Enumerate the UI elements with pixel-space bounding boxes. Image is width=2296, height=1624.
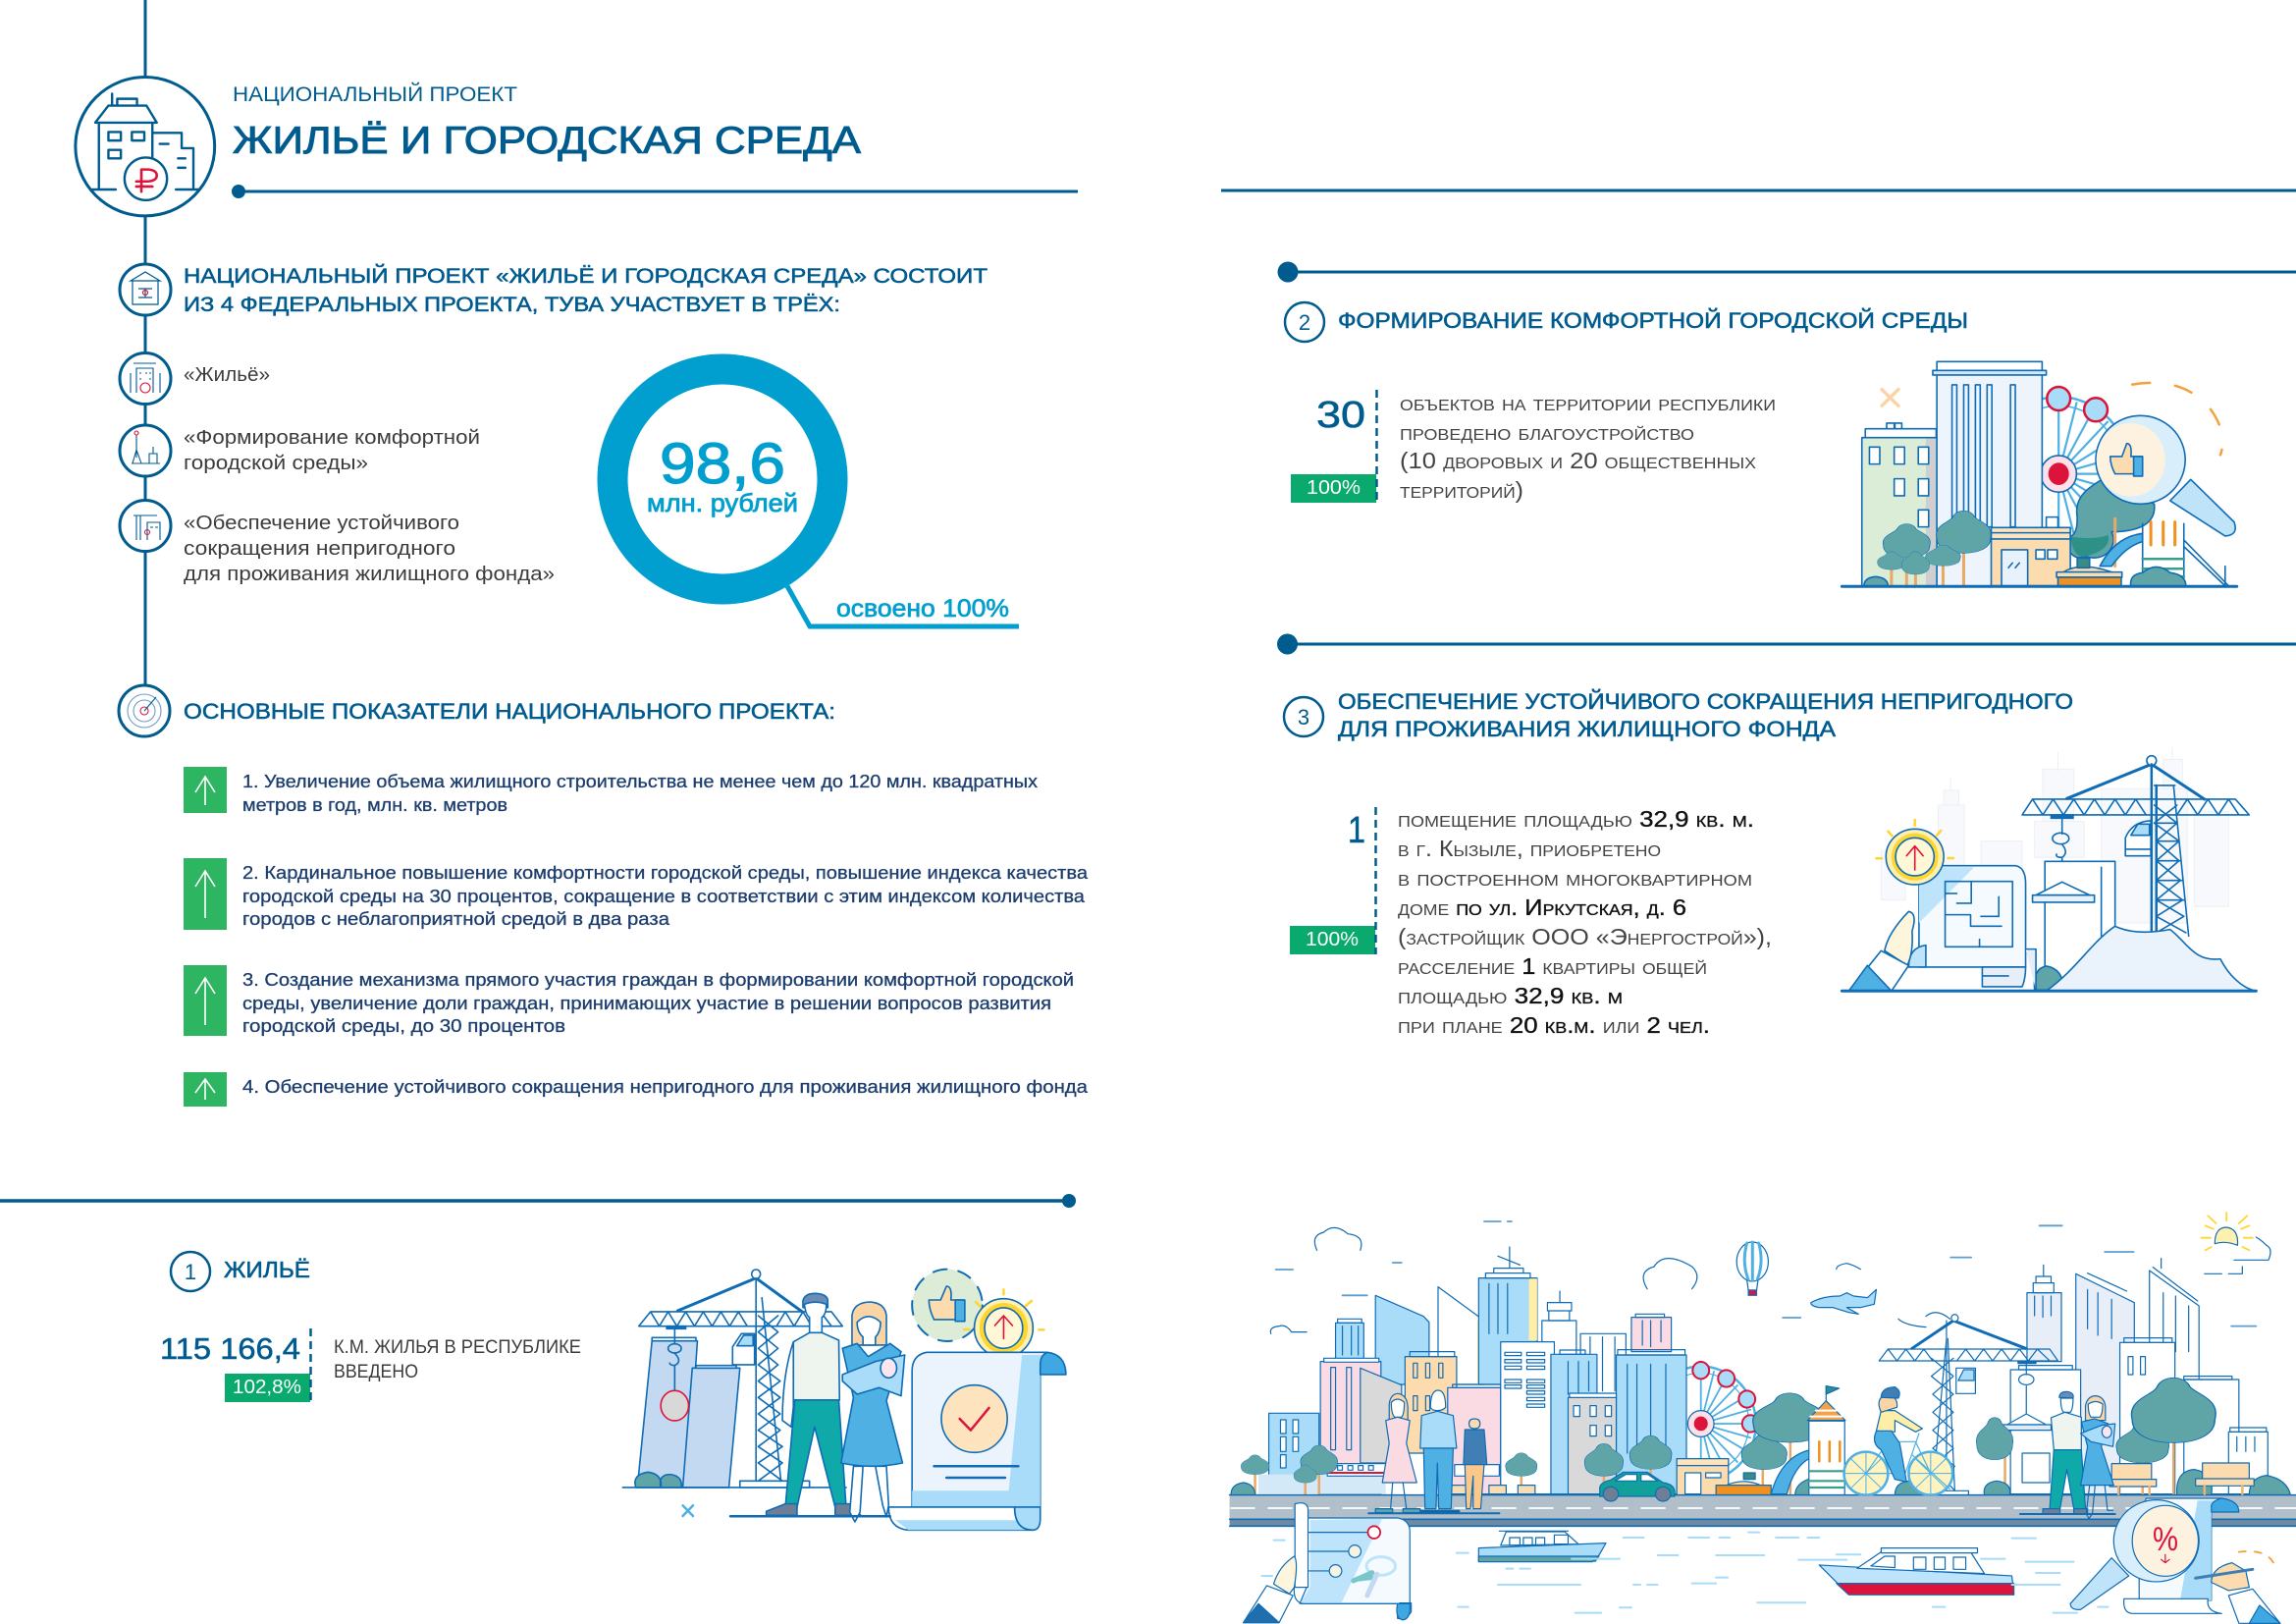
building under construction bbox=[2045, 861, 2115, 990]
stat description: resettlement: в г. Кызыле, приобретено bbox=[1398, 836, 1661, 861]
panorama crane bbox=[1879, 1315, 2057, 1495]
background skyline bbox=[1881, 748, 2228, 923]
mid-ground buildings bbox=[1258, 1342, 1686, 1494]
right skyline bbox=[2010, 1259, 2268, 1494]
couple on the right bbox=[2020, 1391, 2115, 1519]
stat description: housing bbox=[334, 1337, 581, 1382]
top right rule bbox=[1221, 189, 2296, 192]
big tree bbox=[2067, 478, 2155, 567]
indicator 2: городской среды на 30 процентов, сокращение в соответствии с этим индексом количества bbox=[242, 886, 1086, 906]
indicator 1: 1. Увеличение объема жилищного строительства не менее чем до 120 млн. квадратных bbox=[242, 771, 1039, 791]
icon: housing project bbox=[120, 353, 171, 405]
section 2 number bbox=[1285, 302, 1324, 342]
stat description: resettlement: (застройщик ООО «Энергострой»), bbox=[1398, 924, 1772, 949]
indicator 2: 2. Кардинальное повышение комфортности городской среды, повышение индекса качества bbox=[242, 862, 1089, 883]
stat: 30 objects: 30 bbox=[1316, 395, 1365, 436]
stat description: improvement: объектов на территории республики bbox=[1400, 390, 1776, 415]
man bbox=[767, 1293, 861, 1515]
list item: resettlement bbox=[184, 513, 555, 585]
stat description: resettlement: помещение площадью 32,9 кв. м. bbox=[1398, 806, 1754, 832]
decorative orange arc bbox=[2132, 383, 2222, 455]
benches bbox=[1451, 1463, 2254, 1494]
heading: project composition: НАЦИОНАЛЬНЫЙ ПРОЕКТ «ЖИЛЬЁ И ГОРОДСКАЯ СРЕДА» СОСТОИТ bbox=[184, 263, 988, 288]
donut value: 98,6 bbox=[660, 432, 785, 496]
stat: housing commissioned: 115 166,4 bbox=[160, 1331, 300, 1366]
section 2 number: 2 bbox=[1299, 310, 1310, 335]
illustration: construction site and floor plan bbox=[1842, 748, 2256, 991]
ferris wheel bbox=[1987, 387, 2131, 551]
hot air balloon bbox=[1736, 1242, 1768, 1295]
callout: mastered 100%: освоено 100% bbox=[836, 595, 1009, 623]
water ripples bbox=[1262, 1533, 2109, 1613]
illustration: city panorama bbox=[1230, 1213, 2296, 1623]
stat: 30 objects: 100% bbox=[1307, 477, 1361, 499]
stat description: improvement: (10 дворовых и 20 общественных bbox=[1400, 448, 1756, 473]
indicator 1 bbox=[184, 767, 1039, 815]
icon: house with ruble bbox=[76, 77, 215, 216]
document with check mark bbox=[888, 1352, 1066, 1530]
lifted panel bbox=[2033, 867, 2102, 936]
icon: urban environment project bbox=[120, 425, 171, 476]
bush bbox=[2034, 966, 2063, 990]
icon: thumbs up badge bbox=[912, 1270, 983, 1341]
section 3 heading bbox=[1338, 689, 2073, 741]
donut: 98.6 million rubles bbox=[613, 369, 832, 589]
list item: housing: «Жильё» bbox=[184, 364, 270, 386]
list item: urban environment: «Формирование комфортной bbox=[184, 427, 480, 449]
heading: key indicators: ОСНОВНЫЕ ПОКАЗАТЕЛИ НАЦИОНАЛЬНОГО ПРОЕКТА: bbox=[184, 699, 835, 724]
indicator 2: городов с неблагоприятной средой в два раза bbox=[242, 908, 670, 929]
clouds and sun bbox=[1270, 1213, 2270, 1333]
indicator 3: среды, увеличение доли граждан, принимающих участие в решении вопросов развития bbox=[242, 993, 1051, 1013]
list item: urban environment: городской среды» bbox=[184, 453, 368, 474]
trees bbox=[1864, 511, 1991, 586]
left scroll with keys bbox=[1244, 1503, 1412, 1623]
stat description: improvement: проведено благоустройство bbox=[1400, 419, 1694, 445]
vertical timeline bbox=[143, 0, 147, 711]
stat: housing commissioned bbox=[160, 1328, 310, 1402]
green residential building bbox=[1862, 423, 1936, 586]
stat description: improvement bbox=[1400, 390, 1776, 503]
slide and playground bbox=[2100, 522, 2228, 586]
list item: resettlement: «Обеспечение устойчивого bbox=[184, 513, 459, 534]
illustration: construction and family bbox=[622, 1270, 1066, 1530]
section 1 heading: ЖИЛЬЁ bbox=[224, 1257, 310, 1282]
indicator 2 bbox=[184, 858, 1089, 930]
list item: resettlement: сокращения непригодного bbox=[184, 538, 455, 560]
indicator 3: 3. Создание механизма прямого участия граждан в формировании комфортной городской bbox=[242, 969, 1074, 990]
floor plan scroll bbox=[1908, 866, 2036, 990]
background skyscrapers bbox=[1336, 1247, 1672, 1399]
stat: 1 room: 100% bbox=[1306, 929, 1359, 950]
list item: resettlement: для проживания жилищного фонда» bbox=[184, 564, 555, 585]
trees bbox=[1231, 1378, 2290, 1495]
section 3 number: 3 bbox=[1298, 705, 1309, 730]
section rule: urban environment bbox=[1278, 261, 2296, 283]
icon: coin with up arrow bbox=[964, 1289, 1043, 1358]
stat description: resettlement bbox=[1398, 806, 1772, 1038]
title rule bbox=[232, 185, 1078, 198]
road bbox=[1230, 1495, 2296, 1526]
title kicker: НАЦИОНАЛЬНЫЙ ПРОЕКТ bbox=[233, 82, 517, 106]
woman with baby bbox=[841, 1302, 905, 1522]
marker bbox=[1882, 390, 1898, 406]
ground and marker bbox=[683, 1505, 890, 1516]
snow mound bbox=[2047, 926, 2256, 991]
illustration: improved city block bbox=[1842, 361, 2237, 586]
magnifier with thumbs up bbox=[2096, 415, 2235, 536]
icon: target bbox=[119, 685, 170, 736]
stat: housing commissioned: 102,8% bbox=[233, 1377, 301, 1398]
stat description: housing: К.М. ЖИЛЬЯ В РЕСПУБЛИКЕ bbox=[334, 1337, 581, 1358]
stat: 30 objects bbox=[1291, 390, 1376, 503]
section 2 heading: ФОРМИРОВАНИЕ КОМФОРТНОЙ ГОРОДСКОЙ СРЕДЫ bbox=[1338, 308, 1968, 333]
stat: 1 room bbox=[1290, 807, 1376, 954]
airplane bbox=[1811, 1289, 1876, 1314]
list item: urban environment bbox=[184, 427, 480, 474]
right scroll with magnifier and pen bbox=[2070, 1498, 2280, 1623]
car bbox=[1600, 1472, 1675, 1501]
big boat bbox=[1819, 1548, 2014, 1595]
section 1 number bbox=[171, 1252, 210, 1291]
stat description: resettlement: в построенном многоквартирном bbox=[1398, 865, 1752, 891]
section 1 number: 1 bbox=[185, 1260, 196, 1284]
indicator 3: городской среды, до 30 процентов bbox=[242, 1015, 565, 1036]
tall building bbox=[1933, 361, 2057, 586]
kiosk and sandbox bbox=[1677, 1459, 1771, 1495]
donut unit: млн. рублей bbox=[647, 488, 798, 517]
icon: resettlement project bbox=[120, 501, 171, 552]
section 3 heading: ОБЕСПЕЧЕНИЕ УСТОЙЧИВОГО СОКРАЩЕНИЯ НЕПРИГОДНОГО bbox=[1338, 689, 2073, 714]
percent sign in magnifier: % bbox=[2153, 1521, 2178, 1558]
section 3 number bbox=[1284, 697, 1323, 736]
ground bbox=[1842, 585, 2237, 588]
callout: mastered 100% bbox=[787, 586, 1019, 626]
ground bbox=[1842, 990, 2256, 993]
indicator 4: 4. Обеспечение устойчивого сокращения непригодного для проживания жилищного фонда bbox=[242, 1076, 1089, 1097]
coin with up arrow bbox=[1876, 820, 1953, 885]
icon: federal projects bbox=[120, 264, 171, 315]
buildings bbox=[622, 1337, 846, 1488]
stat description: resettlement: расселение 1 квартиры общей bbox=[1398, 953, 1707, 979]
section rule: resettlement bbox=[1277, 634, 2296, 654]
heading: project composition: ИЗ 4 ФЕДЕРАЛЬНЫХ ПРОЕКТА, ТУВА УЧАСТВУЕТ В ТРЁХ: bbox=[184, 293, 840, 316]
stat description: improvement: территорий) bbox=[1400, 477, 1523, 503]
stat description: resettlement: при плане 20 кв.м. или 2 чел. bbox=[1398, 1012, 1710, 1038]
hand holding plan bbox=[1848, 911, 1914, 991]
family on the left bbox=[1368, 1390, 1499, 1513]
main title: ЖИЛЬЁ И ГОРОДСКАЯ СРЕДА bbox=[233, 120, 861, 162]
stat description: resettlement: доме по ул. Иркутская, д. 6 bbox=[1398, 894, 1686, 920]
indicator 1: метров в год, млн. кв. метров bbox=[242, 794, 507, 815]
indicator 4 bbox=[184, 1072, 1089, 1107]
stat: 1 room: 1 bbox=[1348, 810, 1365, 851]
section 3 heading: ДЛЯ ПРОЖИВАНИЯ ЖИЛИЩНОГО ФОНДА bbox=[1338, 717, 1836, 741]
ferris wheel bbox=[1646, 1362, 1759, 1481]
stat description: resettlement: площадью 32,9 кв. м bbox=[1398, 983, 1623, 1008]
cyclist bbox=[1844, 1387, 1952, 1495]
heading: project composition bbox=[184, 263, 988, 316]
tower crane bbox=[639, 1270, 842, 1488]
playground bbox=[1771, 1386, 1845, 1495]
tower crane bbox=[2022, 756, 2249, 936]
stat description: housing: ВВЕДЕНО bbox=[334, 1362, 418, 1382]
small boat bbox=[1478, 1531, 1606, 1562]
section rule: housing bbox=[0, 1194, 1076, 1208]
kiosk bbox=[1992, 527, 2070, 586]
sandbox bbox=[2056, 558, 2122, 586]
indicator 3 bbox=[184, 965, 1074, 1036]
